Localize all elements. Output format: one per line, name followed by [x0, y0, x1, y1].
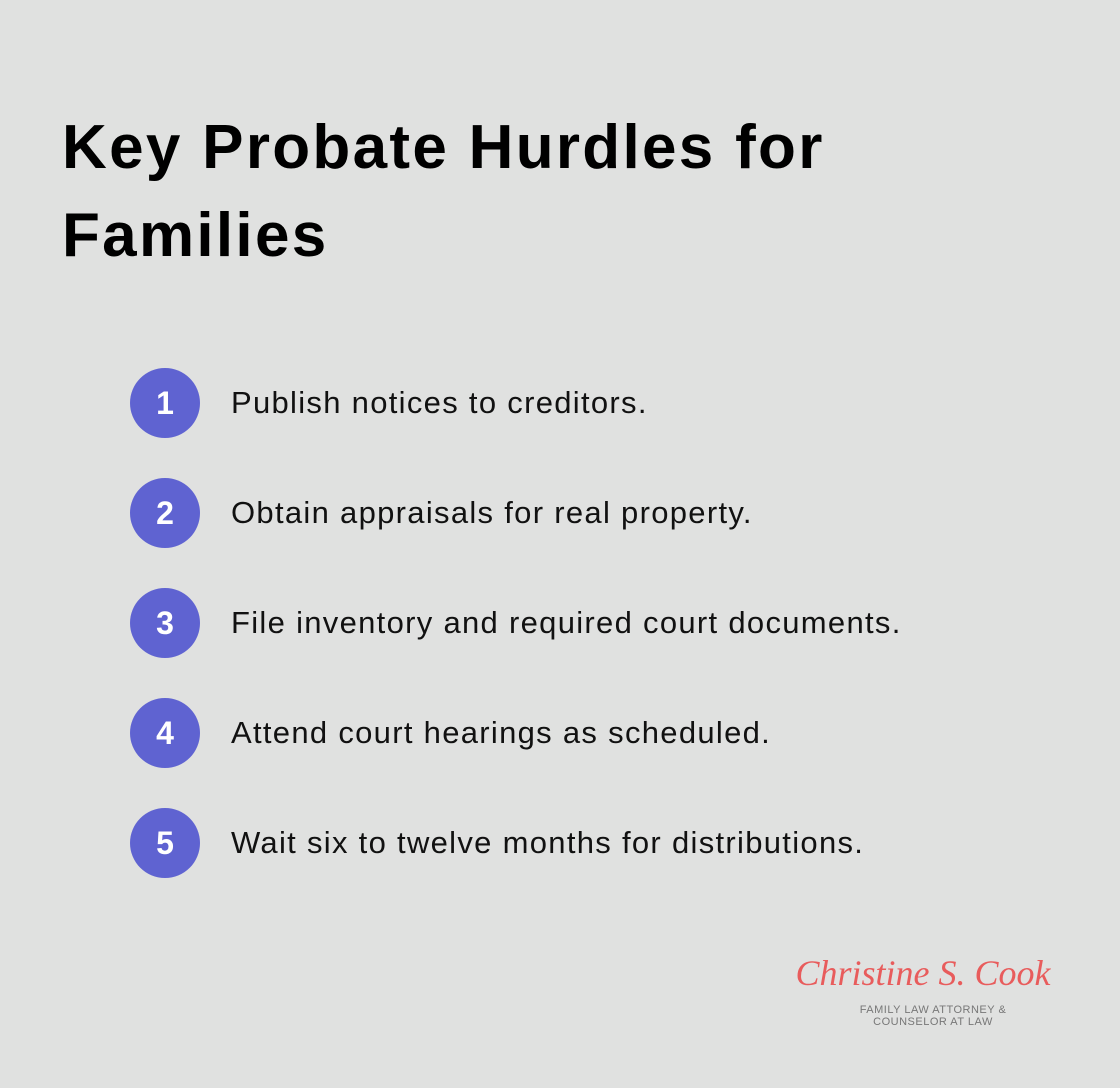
- logo: Christine S. Cook: [795, 953, 1050, 993]
- logo: FAMILY LAW ATTORNEY &: [860, 1004, 1006, 1016]
- item 1: Publish notices to creditors.: [231, 385, 648, 420]
- item 3: File inventory and required court documents.: [231, 605, 902, 640]
- item 2: [130, 478, 753, 548]
- item 1: 1: [156, 385, 174, 421]
- title: Key Probate Hurdles for: [62, 113, 825, 182]
- item 3: 3: [156, 605, 174, 641]
- item 5: 5: [156, 825, 174, 861]
- item 5: [130, 808, 864, 878]
- logo: [795, 953, 1051, 1028]
- item 4: [130, 698, 771, 768]
- title: Families: [62, 201, 329, 270]
- item 2: 2: [156, 495, 174, 531]
- item 5: Wait six to twelve months for distributions.: [231, 825, 864, 860]
- item 2: Obtain appraisals for real property.: [231, 495, 753, 530]
- item 4: 4: [156, 715, 174, 751]
- item 3: [130, 588, 902, 658]
- item 1: [130, 368, 648, 438]
- title: [62, 113, 825, 270]
- item 4: Attend court hearings as scheduled.: [231, 715, 771, 750]
- logo: COUNSELOR AT LAW: [873, 1016, 993, 1028]
